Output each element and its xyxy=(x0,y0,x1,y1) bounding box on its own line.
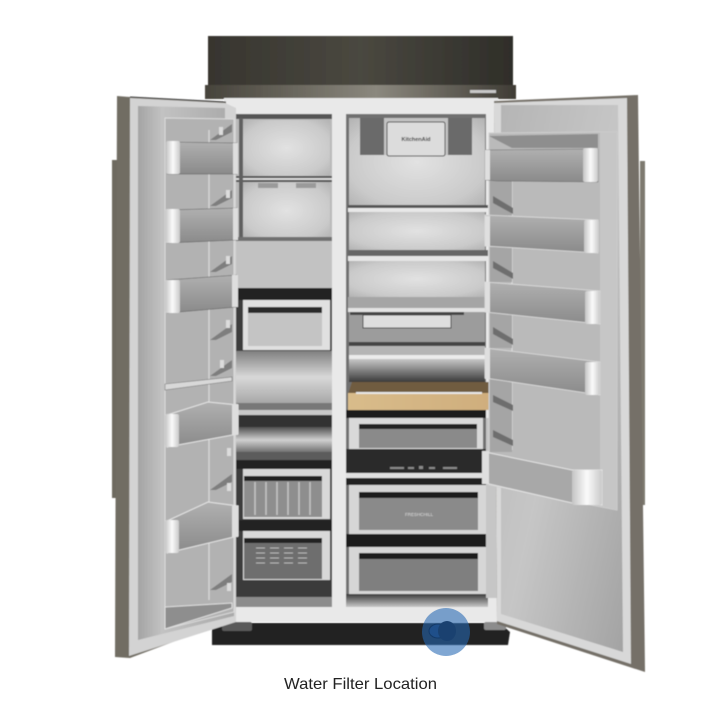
gray bay xyxy=(236,241,332,288)
shelf 4 xyxy=(349,342,485,346)
vents xyxy=(258,183,316,188)
dark recess xyxy=(346,534,488,547)
drawer ribs xyxy=(255,482,310,515)
right compartment xyxy=(346,114,497,607)
drawer A xyxy=(349,418,483,449)
bay 3 xyxy=(349,261,485,297)
lower mid bay xyxy=(236,427,332,453)
upper bay xyxy=(349,118,485,206)
brand label: KitchenAid xyxy=(401,137,431,143)
compartment floor xyxy=(236,580,332,607)
dark recess 2 xyxy=(236,460,332,469)
shelf band xyxy=(236,410,332,415)
bin 3 xyxy=(165,275,238,313)
dark recess xyxy=(346,410,486,418)
toe kick xyxy=(212,623,510,645)
right door handle xyxy=(640,161,645,505)
drawer C xyxy=(349,547,487,594)
compartment floor xyxy=(346,594,488,607)
shelf 3 xyxy=(348,297,486,308)
bin 5 xyxy=(165,502,238,553)
lower bay xyxy=(349,359,485,382)
drawer 3 xyxy=(236,531,332,581)
left compartment xyxy=(236,114,332,607)
middle bay xyxy=(236,351,332,403)
control panel xyxy=(346,449,486,473)
shelf 2 xyxy=(348,250,488,256)
drawer perforation xyxy=(256,548,312,563)
door edge xyxy=(494,95,645,672)
dark recess 3 xyxy=(236,520,332,531)
drawer label: FRESHCHILL xyxy=(405,512,433,517)
wire shelf 3 xyxy=(236,452,332,460)
door top edge line xyxy=(130,97,226,102)
top dark strip xyxy=(236,114,332,119)
refrigerator xyxy=(112,36,645,672)
blue highlight circle xyxy=(422,608,470,656)
upper bay xyxy=(243,120,330,176)
right hinge xyxy=(484,622,506,630)
inner bay xyxy=(489,132,617,510)
side rack xyxy=(239,118,243,240)
second bay xyxy=(243,182,330,239)
ice unit xyxy=(360,118,472,156)
door edge xyxy=(115,96,226,658)
left door xyxy=(115,96,238,658)
bin 1 xyxy=(166,141,238,174)
brand badge xyxy=(470,90,496,93)
bin 5 xyxy=(482,451,602,505)
drawer 1 xyxy=(236,300,332,351)
bin 2 xyxy=(165,208,238,243)
shelf 1 xyxy=(348,205,488,208)
bin 2 xyxy=(485,215,599,253)
door shelf rail xyxy=(165,377,232,390)
bin 4 xyxy=(485,348,600,395)
dark band xyxy=(236,415,332,427)
divider strip xyxy=(346,473,488,478)
cabinet frame xyxy=(224,98,498,622)
small drawer xyxy=(349,312,485,342)
right door xyxy=(482,95,645,672)
top trim band xyxy=(205,85,516,99)
inner bay xyxy=(165,118,234,629)
lower door panel xyxy=(501,105,623,652)
compartment back xyxy=(236,114,332,607)
compartment back xyxy=(346,114,486,607)
wire shelf xyxy=(236,237,332,241)
drawer B xyxy=(349,485,487,534)
left door handle xyxy=(112,160,118,498)
bin 4 xyxy=(165,402,238,447)
left hinge xyxy=(222,622,252,631)
gallery brackets xyxy=(209,124,232,600)
bottom tray xyxy=(165,603,232,629)
door frame xyxy=(129,98,236,656)
top shelf xyxy=(236,176,332,182)
gallery brackets xyxy=(489,134,598,452)
bay 2 xyxy=(349,212,485,250)
bin 3 xyxy=(485,282,600,324)
door frame xyxy=(494,98,631,664)
filter cap front xyxy=(438,621,456,641)
wire shelf 2 xyxy=(236,403,332,410)
control buttons xyxy=(390,466,457,469)
wood drawer xyxy=(348,382,490,410)
bin 1 xyxy=(485,148,598,182)
door liner xyxy=(138,106,234,640)
right side trim xyxy=(486,418,497,598)
water filter marker xyxy=(422,608,470,656)
filter cap xyxy=(429,624,447,638)
drawer 2 xyxy=(236,469,332,520)
inner bay side xyxy=(600,132,617,510)
top grille panel xyxy=(208,36,513,86)
caption: Water Filter Location xyxy=(284,676,437,693)
dark recess xyxy=(236,288,332,300)
